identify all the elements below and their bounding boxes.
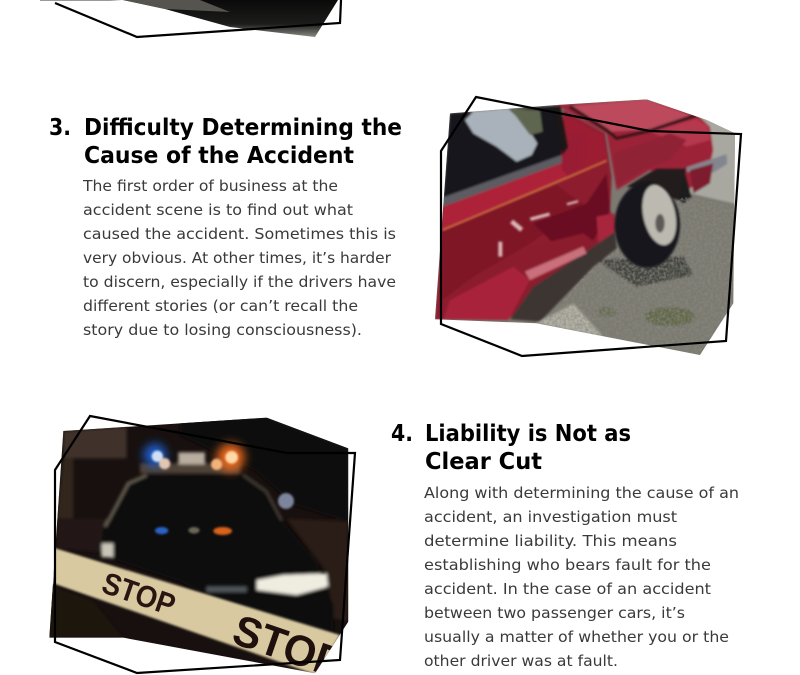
wheel bbox=[615, 182, 680, 268]
section 3: heading: Difficulty Determining the bbox=[84, 113, 402, 141]
outline: car photo frame bbox=[441, 97, 741, 356]
section 4: body text: accident, an investigation must bbox=[424, 508, 677, 526]
section 3: body text: to discern, especially if the drivers have bbox=[83, 273, 396, 291]
window and airbag bbox=[443, 106, 563, 197]
hood bbox=[557, 99, 713, 190]
section 4: heading: Liability is Not as bbox=[425, 419, 631, 447]
section 3: heading: 3. bbox=[49, 113, 71, 141]
section 3: body text: caused the accident. Sometimes this is bbox=[83, 225, 396, 243]
light bar bbox=[140, 463, 240, 473]
section 4: body text: determine liability. This means bbox=[424, 532, 677, 550]
photo: police car behind stop tape bbox=[49, 418, 348, 674]
section 3: body text: accident scene is to find out what bbox=[83, 201, 353, 219]
headlight right bbox=[257, 573, 328, 595]
section 3: heading: Cause of the Accident bbox=[84, 141, 354, 169]
lower damage bbox=[510, 232, 617, 322]
outline: police photo frame bbox=[55, 416, 355, 673]
wheel arch dark bbox=[627, 168, 687, 200]
door pinstripe bbox=[443, 161, 607, 230]
section 4: body text bbox=[424, 484, 739, 670]
section 4: body text: accident. In the case of an accident bbox=[424, 580, 711, 598]
section 3: body text: different stories (or can’t recall the bbox=[83, 297, 358, 315]
section 3: heading bbox=[49, 113, 402, 169]
section 4: body text: between two passenger cars, it’s bbox=[424, 604, 685, 622]
photo: police car behind stop tape: STOP bbox=[98, 566, 180, 623]
section 4: heading: 4. bbox=[391, 419, 413, 447]
section 4: body text: establishing who bears fault for the bbox=[424, 556, 711, 574]
section 4: body text: usually a matter of whether you or the bbox=[424, 628, 729, 646]
car body bbox=[100, 473, 333, 635]
gravel texture bbox=[541, 197, 734, 355]
section 4: body text: other driver was at fault. bbox=[424, 652, 618, 670]
section 4: body text: Along with determining the cause of an bbox=[424, 484, 739, 502]
tape bbox=[53, 548, 340, 675]
section 3: body text: The first order of business at the bbox=[82, 177, 338, 195]
photo: damaged red car bbox=[435, 99, 735, 355]
door damage scratches bbox=[498, 200, 578, 257]
section 3: body text bbox=[82, 177, 396, 339]
section 3: body text: very obvious. At other times, it’s harder bbox=[83, 249, 392, 267]
bumper bbox=[687, 154, 727, 173]
outline: previous section photo frame bbox=[55, 0, 341, 37]
door / body bbox=[435, 110, 617, 320]
section 4: heading: Clear Cut bbox=[425, 447, 542, 475]
image: cropped photo from previous section bbox=[40, 0, 338, 37]
section 4: heading bbox=[391, 419, 631, 475]
section 3: body text: story due to losing consciousness). bbox=[83, 321, 362, 339]
